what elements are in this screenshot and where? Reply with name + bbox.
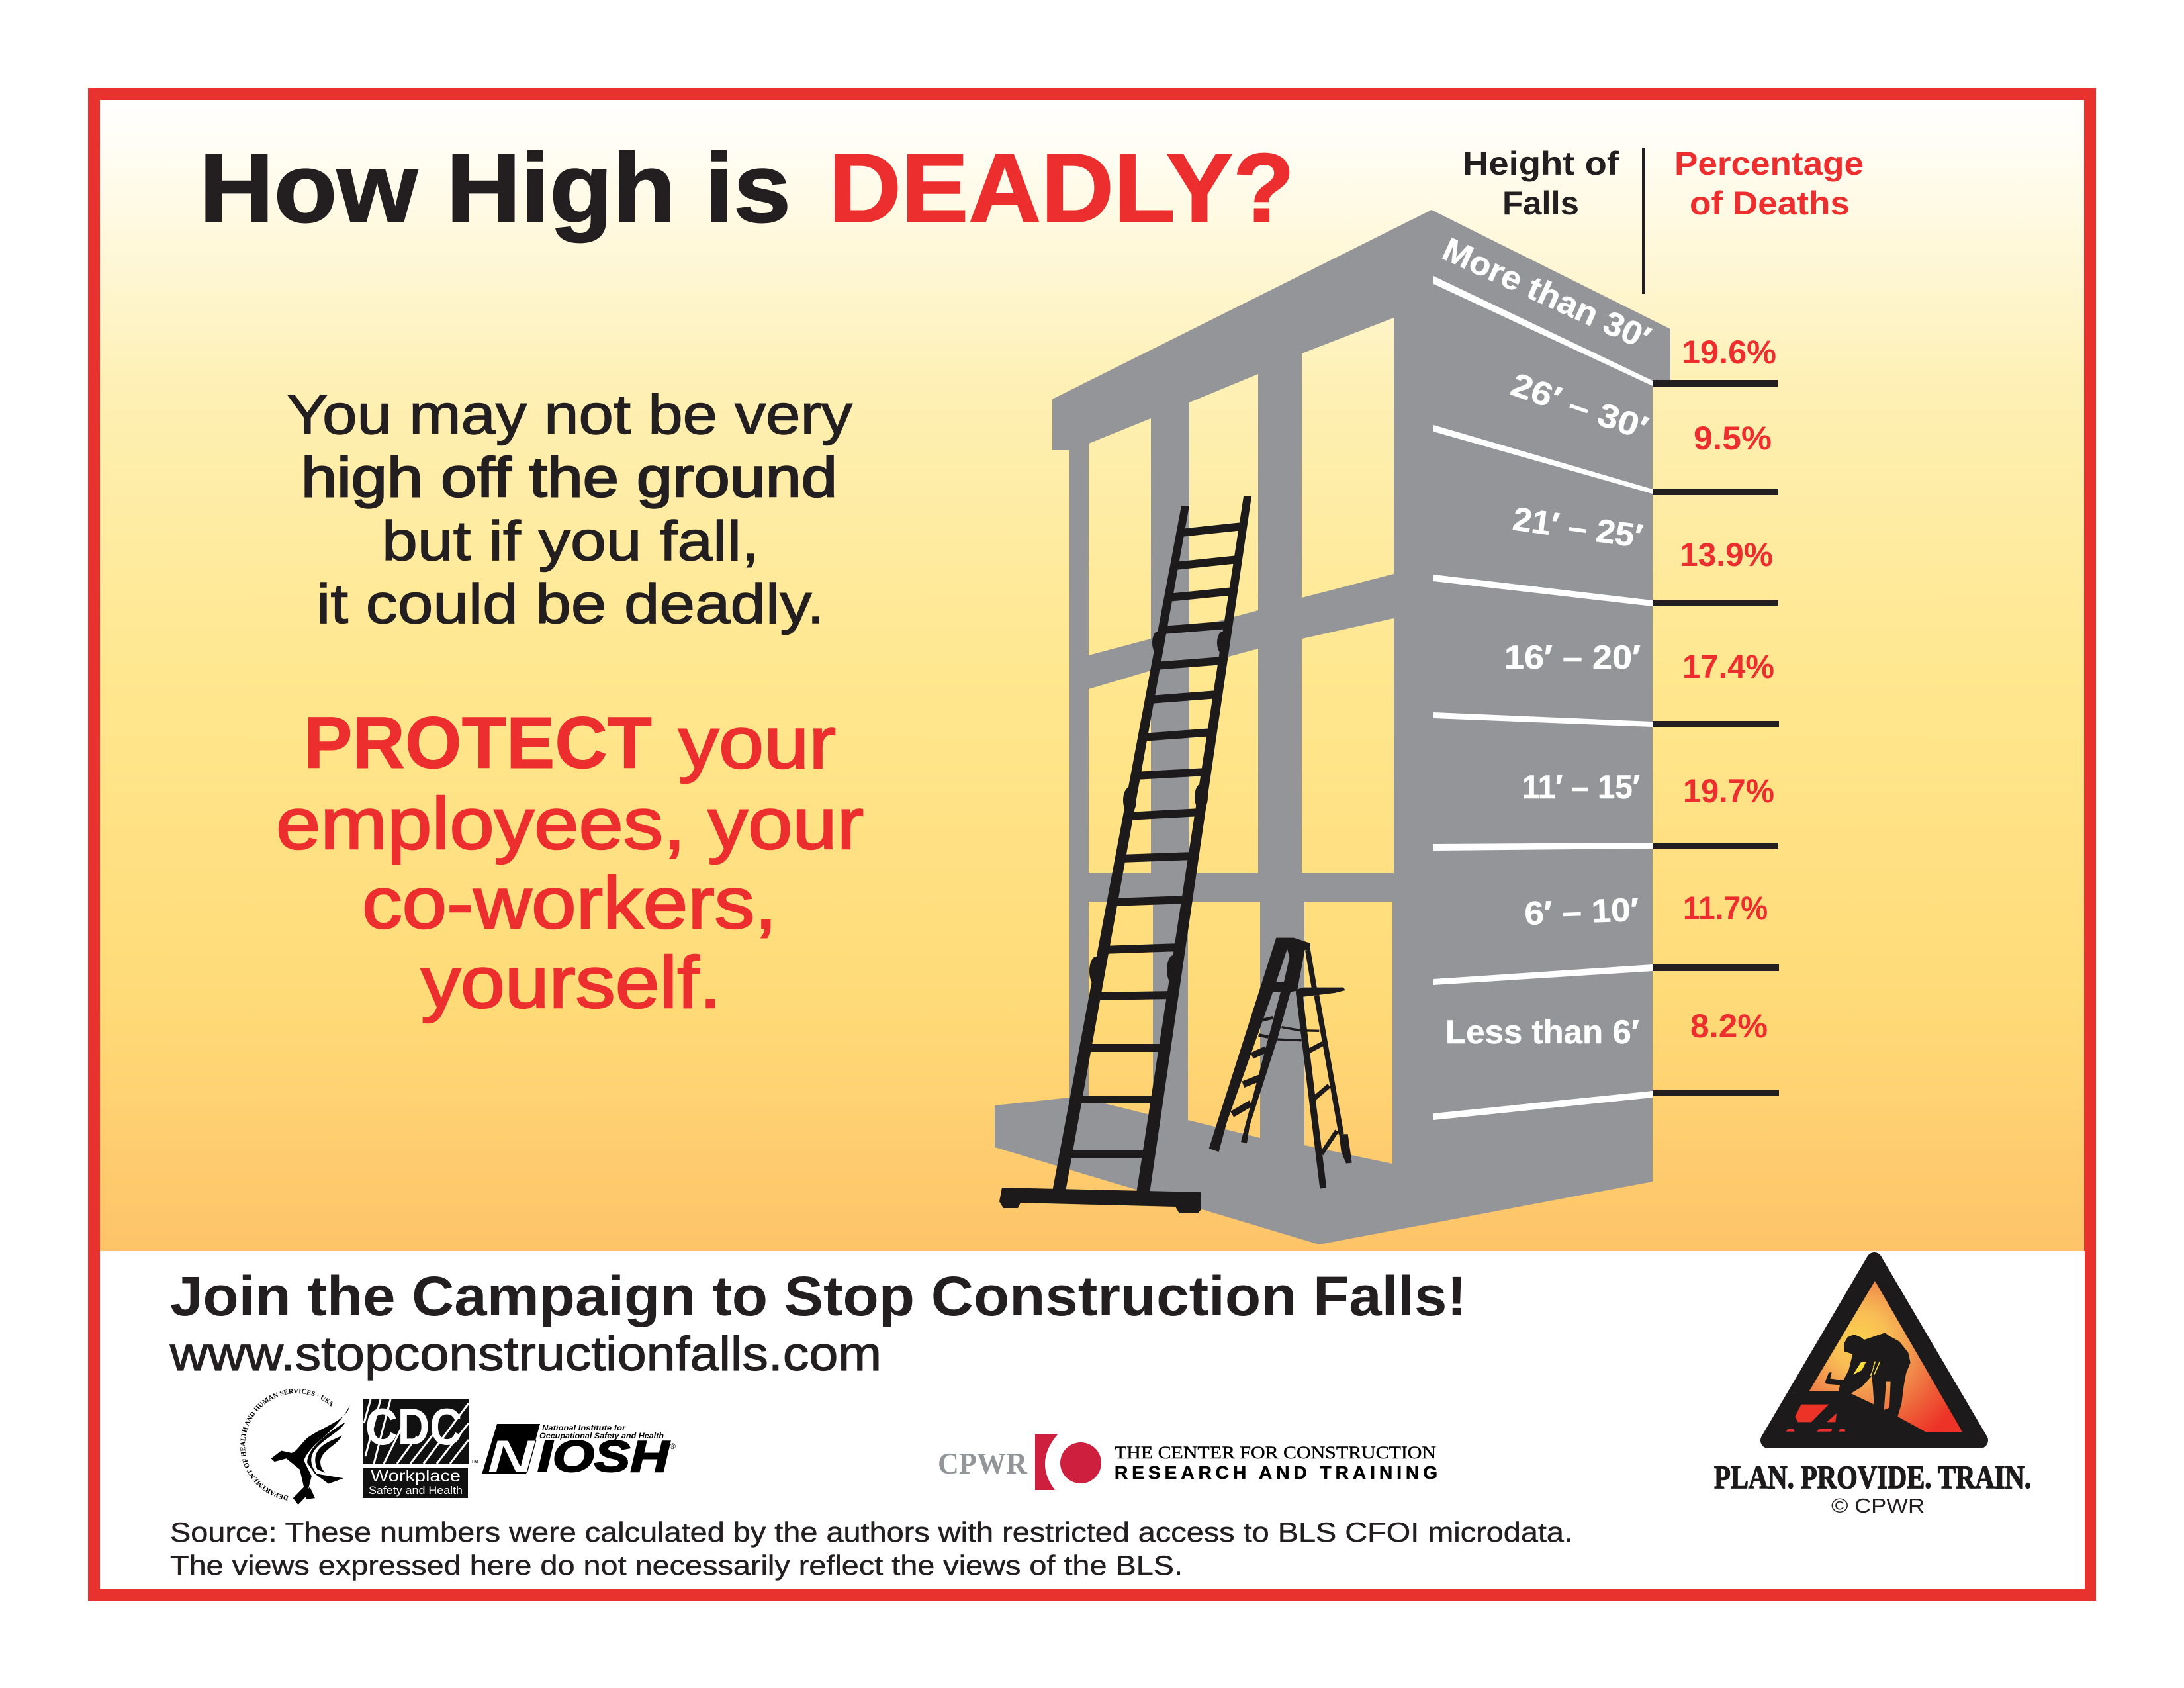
logo: worker triangle <box>1768 1260 1980 1440</box>
source note <box>170 1517 1572 1581</box>
logo: CPWR <box>938 1434 1437 1490</box>
icon: step ladder <box>1209 938 1352 1188</box>
intro text <box>287 383 852 635</box>
logo: CDC Workplace Safety and Health: Workplace <box>371 1467 461 1485</box>
campaign heading: Join the Campaign to Stop Construction Falls! <box>170 1265 1467 1327</box>
logo: CPWR: RESEARCH AND TRAINING <box>1115 1462 1437 1483</box>
logo: CDC Workplace Safety and Health: Safety and Health <box>369 1484 463 1497</box>
height labels: Less than 6′ <box>1445 1013 1639 1051</box>
percentage values: 9.5% <box>1694 420 1772 457</box>
call to action text: your <box>678 702 836 784</box>
title <box>199 134 1295 243</box>
intro text: high off the ground <box>301 446 837 508</box>
source note: Source: These numbers were calculated by the authors with restricted access to BLS CFOI microdata. <box>170 1517 1572 1548</box>
intro text: but if you fall, <box>382 510 759 572</box>
height labels <box>1437 230 1656 1051</box>
source note: The views expressed here do not necessarily reflect the views of the BLS. <box>170 1550 1183 1581</box>
logo: CDC Workplace Safety and Health: CDC <box>365 1397 462 1456</box>
percentage values <box>1680 334 1776 1045</box>
call to action text <box>276 702 864 1023</box>
background gradient panel <box>100 100 2085 1251</box>
logo: HHS eagle: DEPARTMENT OF HEALTH AND HUMAN SERVICES · USA <box>240 1389 332 1501</box>
call to action text: yourself. <box>421 942 721 1023</box>
percentage values: 19.6% <box>1682 334 1776 371</box>
percentage values: 8.2% <box>1690 1008 1768 1045</box>
copyright: © CPWR <box>1831 1494 1925 1517</box>
intro text: You may not be very <box>287 383 852 445</box>
logo: NIOSH: Occupational Safety and Health <box>539 1431 664 1440</box>
column headers <box>1463 145 1864 222</box>
title: DEADLY? <box>829 134 1295 243</box>
icon: extension ladder <box>999 496 1251 1213</box>
header divider <box>1642 148 1645 294</box>
height labels: 6′ – 10′ <box>1524 891 1639 932</box>
logo: CPWR: CPWR <box>938 1446 1028 1480</box>
percentage values: 17.4% <box>1682 648 1774 685</box>
height labels: 21′ – 25′ <box>1510 500 1645 555</box>
height labels: More than 30′ <box>1437 230 1656 357</box>
logo: NIOSH <box>482 1423 676 1482</box>
logo: CPWR: THE CENTER FOR CONSTRUCTION <box>1115 1443 1436 1462</box>
campaign website: www.stopconstructionfalls.com <box>169 1328 882 1381</box>
black tick lines for percentages <box>1653 380 1779 1096</box>
column headers: Height of <box>1463 145 1619 182</box>
percentage values: 13.9% <box>1680 536 1773 573</box>
call to action text: co-workers, <box>362 863 777 944</box>
column headers: Falls <box>1502 185 1579 222</box>
height labels: 11′ – 15′ <box>1522 769 1640 806</box>
building silhouette <box>995 210 1670 1244</box>
call to action text: PROTECT <box>304 702 652 784</box>
column headers: Percentage <box>1674 145 1864 182</box>
white footer panel <box>100 1251 2085 1589</box>
title: How High is <box>199 134 791 243</box>
logo: CDC Workplace Safety and Health: TM <box>471 1460 478 1464</box>
logo: NIOSH: N <box>487 1430 536 1482</box>
logo: NIOSH: ® <box>670 1442 676 1451</box>
height labels: 16′ – 20′ <box>1504 639 1641 676</box>
intro text: it could be deadly. <box>316 573 825 635</box>
slogan: PLAN. PROVIDE. TRAIN. <box>1714 1458 2031 1495</box>
logo: NIOSH: IOSH <box>537 1432 670 1481</box>
logo: NIOSH: National Institute for <box>542 1423 626 1432</box>
percentage values: 19.7% <box>1683 773 1774 810</box>
logo: CDC Workplace Safety and Health <box>363 1397 478 1498</box>
height labels: 26′ – 30′ <box>1506 365 1653 447</box>
column headers: of Deaths <box>1690 185 1850 222</box>
white height divider lines on building <box>1433 276 1653 1120</box>
percentage values: 11.7% <box>1683 890 1768 927</box>
call to action text: employees, your <box>276 783 864 865</box>
